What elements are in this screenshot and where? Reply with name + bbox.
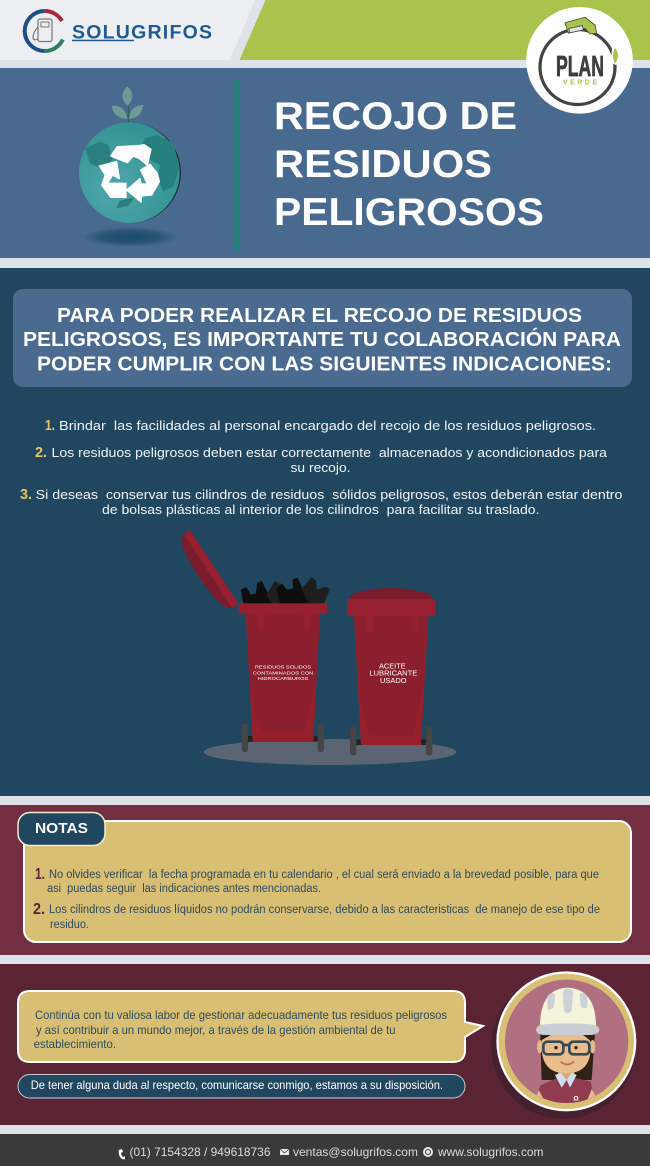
contact note pill bbox=[18, 1074, 465, 1098]
notes tab bbox=[18, 812, 105, 846]
speech bubble bbox=[18, 991, 483, 1062]
logo: Plan Verde: VERDE bbox=[563, 79, 597, 86]
logo: Solugrifos: SOLUGRIFOS bbox=[72, 21, 212, 43]
speech bubble: Continúa con tu valiosa labor de gestionar adecuadamente tus residuos peligrosos bbox=[35, 1008, 447, 1022]
list of indications: 2. bbox=[35, 444, 47, 461]
bin: solid waste: HIDROCARBUROS bbox=[258, 676, 309, 682]
list of indications: 3. bbox=[20, 486, 32, 503]
panel: notes bbox=[0, 805, 650, 955]
contact note pill: De tener alguna duda al respecto, comunicarse conmigo, estamos a su disposición. bbox=[31, 1078, 443, 1092]
illustration: woman with safety helmet bbox=[491, 971, 636, 1119]
logo: Solugrifos bbox=[25, 11, 212, 51]
logo: Plan Verde bbox=[526, 7, 633, 114]
footer: www.solugrifos.com bbox=[437, 1145, 544, 1159]
list of indications: Si deseas conservar tus cilindros de residuos sólidos peligrosos, estos deberán estar dentro bbox=[36, 487, 622, 502]
panel: instructions bbox=[0, 268, 650, 796]
footer bbox=[0, 1134, 650, 1166]
title panel bbox=[0, 68, 650, 258]
icon: recycling globe bbox=[79, 86, 181, 247]
intro callout: PELIGROSOS, ES IMPORTANTE TU COLABORACIÓN PARA bbox=[23, 327, 621, 351]
title: PELIGROSOS bbox=[274, 191, 544, 234]
bin: used lubricant oil bbox=[347, 588, 436, 755]
list of indications: Brindar las facilidades al personal encargado del recojo de los residuos peligrosos. bbox=[59, 418, 596, 433]
title: RECOJO DE bbox=[274, 95, 517, 138]
speech bubble: y así contribuir a un mundo mejor, a través de la gestión ambiental de tu bbox=[36, 1023, 396, 1037]
bin: solid waste: CONTAMINADOS CON bbox=[253, 670, 314, 676]
list of indications: 1. bbox=[45, 417, 55, 434]
notes tab: NOTAS bbox=[35, 820, 88, 837]
logo: Plan Verde: PLAN bbox=[556, 51, 604, 83]
bin: used lubricant oil: LUBRICANTE bbox=[369, 671, 418, 678]
notes text: 1. bbox=[35, 866, 45, 883]
bin: solid waste: RESIDUOS SOLIDOS bbox=[255, 664, 312, 670]
notes text: No olvides verificar la fecha programada en tu calendario , el cual será enviado a la brevedad posible, para que bbox=[49, 869, 599, 881]
icon: mail bbox=[280, 1149, 289, 1155]
icon: phone bbox=[119, 1149, 125, 1159]
panel: closing message bbox=[0, 964, 650, 1125]
icon: web bbox=[423, 1147, 433, 1157]
list of indications: de bolsas plásticas al interior de los cilindros para facilitar su traslado. bbox=[102, 502, 540, 517]
notes text: asi puedas seguir las indicaciones antes mencionadas. bbox=[47, 883, 321, 895]
title bbox=[274, 95, 544, 234]
intro callout: PODER CUMPLIR CON LAS SIGUIENTES INDICACIONES: bbox=[37, 352, 612, 376]
notes text: 2. bbox=[33, 901, 45, 918]
footer: (01) 7154328 / 949618736 bbox=[130, 1145, 271, 1159]
footer: ventas@solugrifos.com bbox=[293, 1145, 418, 1159]
bin: used lubricant oil: ACEITE bbox=[379, 664, 406, 671]
notes text: residuo. bbox=[50, 919, 89, 931]
notes text bbox=[33, 866, 600, 931]
intro callout bbox=[13, 289, 632, 387]
illustration: woman with safety helmet: Ω bbox=[573, 1095, 579, 1102]
title: RESIDUOS bbox=[274, 143, 492, 186]
speech bubble: establecimiento. bbox=[34, 1037, 116, 1051]
list of indications: su recojo. bbox=[290, 460, 350, 475]
intro callout: PARA PODER REALIZAR EL RECOJO DE RESIDUOS bbox=[57, 304, 582, 327]
bin: solid waste bbox=[182, 530, 329, 752]
header band bbox=[0, 0, 650, 60]
list of indications: Los residuos peligrosos deben estar correctamente almacenados y acondicionados para bbox=[52, 445, 608, 460]
bin: used lubricant oil: USADO bbox=[380, 678, 407, 685]
notes text: Los cilindros de residuos líquidos no podrán conservarse, debido a las caracteristicas de manejo de ese tipo de bbox=[49, 904, 600, 916]
illustration: waste bins bbox=[182, 530, 456, 765]
list of indications bbox=[20, 417, 622, 517]
